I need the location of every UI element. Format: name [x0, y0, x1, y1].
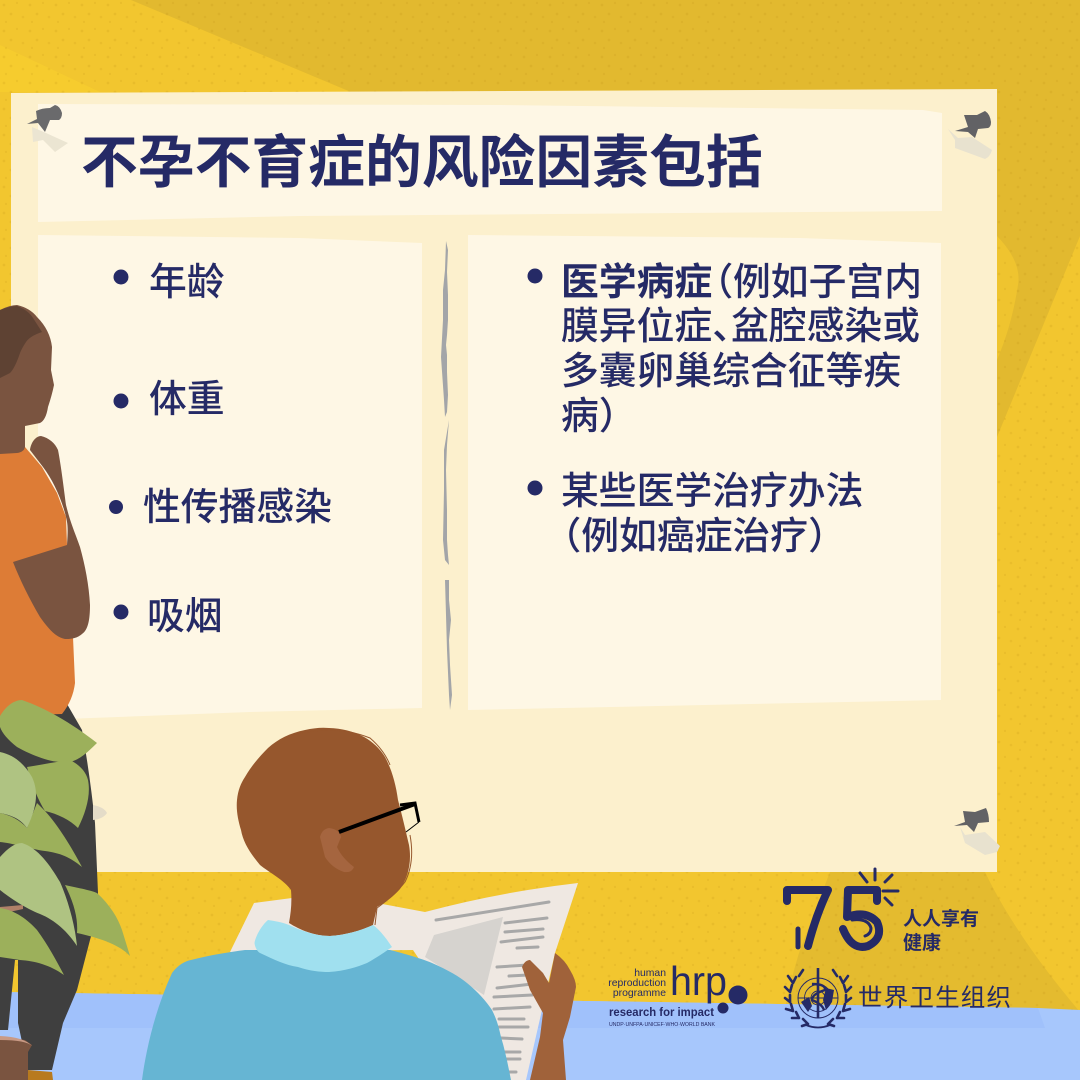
pot: [0, 1036, 32, 1080]
glasses: [339, 803, 419, 832]
notice board: [11, 89, 997, 872]
arm: [13, 436, 90, 639]
logo: hrp: research for impact: [609, 1007, 714, 1019]
sweater: [142, 950, 511, 1080]
head: [237, 728, 410, 936]
bullet: weight: [114, 379, 225, 421]
shadow of hidden pin: [93, 805, 107, 820]
bullet: smoking: [114, 596, 223, 638]
head brush outline: [285, 730, 412, 925]
bullet: medical conditions: 病）: [561, 396, 637, 438]
slogan: 人人享有: [903, 908, 979, 930]
divider brush stroke: [441, 241, 452, 710]
bullet: age: 年龄: [149, 262, 225, 304]
title: 不孕不育症的风险因素包括: [81, 132, 763, 195]
leaves: [0, 700, 130, 975]
left list: risk factors: [109, 262, 332, 638]
bullet: medical conditions: [528, 262, 922, 438]
bullet: medical conditions: 盆腔感染或: [731, 306, 920, 348]
bullet: sexually transmitted infections: 性传播感染: [143, 487, 332, 529]
bullet: age: [114, 262, 225, 304]
logo: hrp: reproduction: [608, 978, 666, 989]
number 75 with rays: [787, 869, 898, 947]
collar: [254, 920, 392, 972]
bullet: medical treatments: 某些医学治疗办法: [561, 471, 863, 513]
bullet: medical conditions: 例如子宫内: [733, 262, 922, 304]
floor: [0, 992, 1080, 1080]
pin: top left: [27, 105, 68, 152]
bullet: medical conditions: （: [696, 262, 733, 304]
bullet: medical treatments: [528, 471, 863, 558]
logo: hrp: human: [634, 968, 666, 979]
logo: hrp: hrp: [670, 958, 727, 1004]
panel: left list background: [38, 235, 422, 720]
legs: [0, 697, 98, 1070]
logo: hrp: programme: [613, 988, 666, 999]
pin: top right: [948, 111, 992, 159]
hair: [0, 306, 42, 378]
right list: medical factors: [528, 262, 922, 558]
bullet: medical conditions: 医学病症: [561, 262, 712, 304]
pin: bottom right: [954, 808, 1000, 855]
shirt: [0, 447, 75, 716]
potted plant: [0, 700, 130, 1080]
shoe: [27, 1070, 53, 1080]
hand: [522, 953, 576, 1080]
panel: right list background: [468, 235, 941, 710]
ear: [320, 828, 354, 872]
newspaper text lines: [436, 902, 549, 1072]
newspaper: [230, 883, 578, 1080]
newspaper picture: [425, 917, 503, 995]
logo: 75 years health for all: [787, 869, 979, 954]
panel: title background: [38, 104, 942, 222]
logo: hrp: [608, 958, 748, 1028]
logo: WHO emblem: [785, 968, 851, 1028]
bullet: medical conditions: 膜异位症、: [561, 306, 750, 348]
branch: [0, 905, 23, 914]
bullet: weight: 体重: [149, 379, 225, 421]
logo: hrp: UNDP·UNFPA·UNICEF·WHO·WORLD BANK: [609, 1022, 716, 1028]
bullet: medical conditions: 多囊卵巢综合征等疾: [561, 351, 901, 393]
seated man illustration: [142, 728, 576, 1080]
bullet: medical treatments: （例如癌症治疗）: [544, 516, 846, 558]
head: [0, 305, 54, 454]
WHO name: 世界卫生组织: [858, 984, 1012, 1012]
bullet: smoking: 吸烟: [147, 596, 223, 638]
standing woman illustration: [0, 305, 98, 1080]
slogan: 健康: [903, 931, 941, 954]
